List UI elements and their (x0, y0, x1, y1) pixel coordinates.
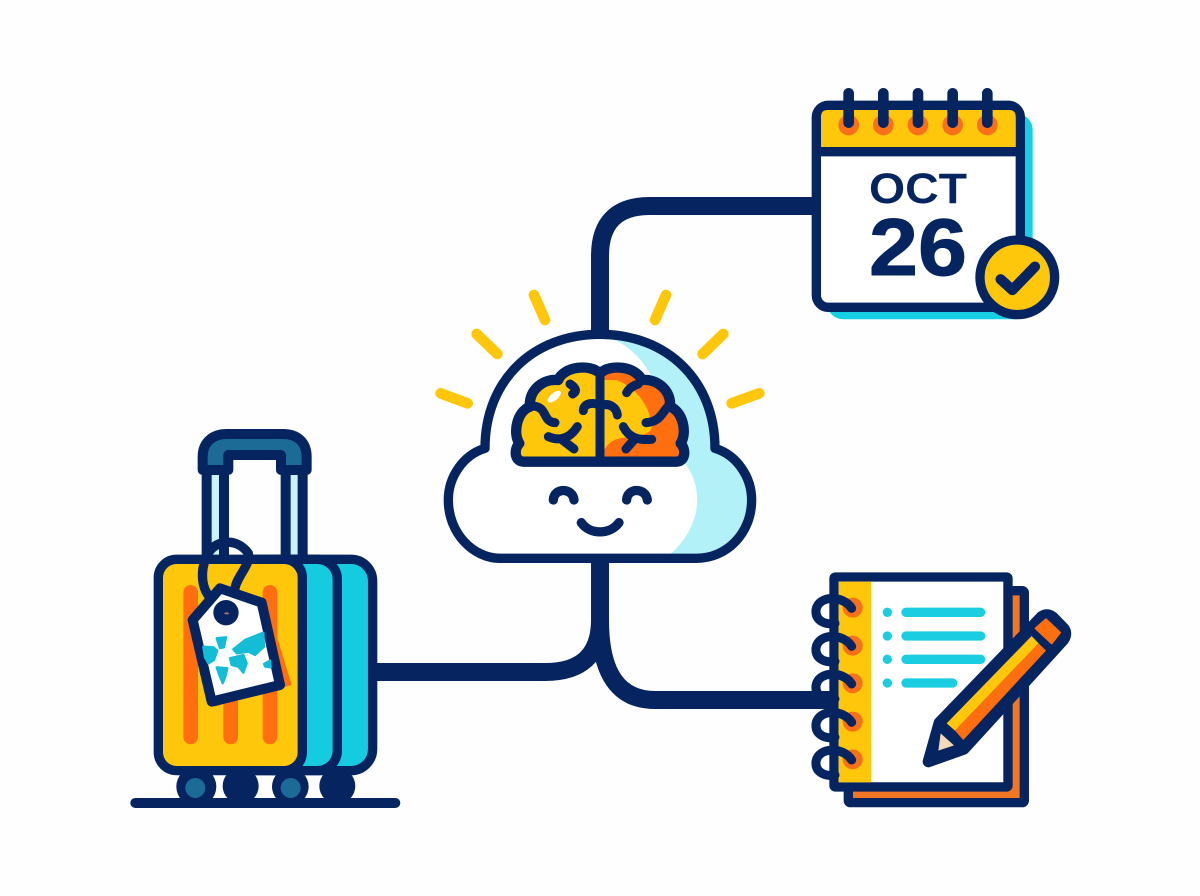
checklist lines (883, 608, 985, 688)
spiral binding (816, 598, 863, 775)
pencil (928, 615, 1065, 762)
smiling face (553, 490, 647, 532)
icon: calendar (816, 93, 1055, 319)
telescopic handle (203, 434, 307, 558)
back page (848, 591, 1024, 803)
ground line (135, 788, 395, 818)
calendar month: OCT (869, 165, 967, 213)
case body (158, 559, 373, 771)
calendar day: 26 (869, 203, 967, 293)
front page (834, 577, 1008, 787)
wheels (176, 767, 355, 807)
icon: smiling cloud with brain (441, 295, 759, 560)
light rays (441, 295, 759, 403)
cloud body (448, 334, 757, 560)
luggage tag with world map (193, 542, 292, 707)
icon: notebook with pencil (816, 577, 1065, 803)
icon: suitcase (135, 434, 395, 807)
brain (516, 368, 684, 462)
connectors linking the cloud to the three icons (370, 206, 835, 700)
icon: check badge (980, 240, 1055, 315)
